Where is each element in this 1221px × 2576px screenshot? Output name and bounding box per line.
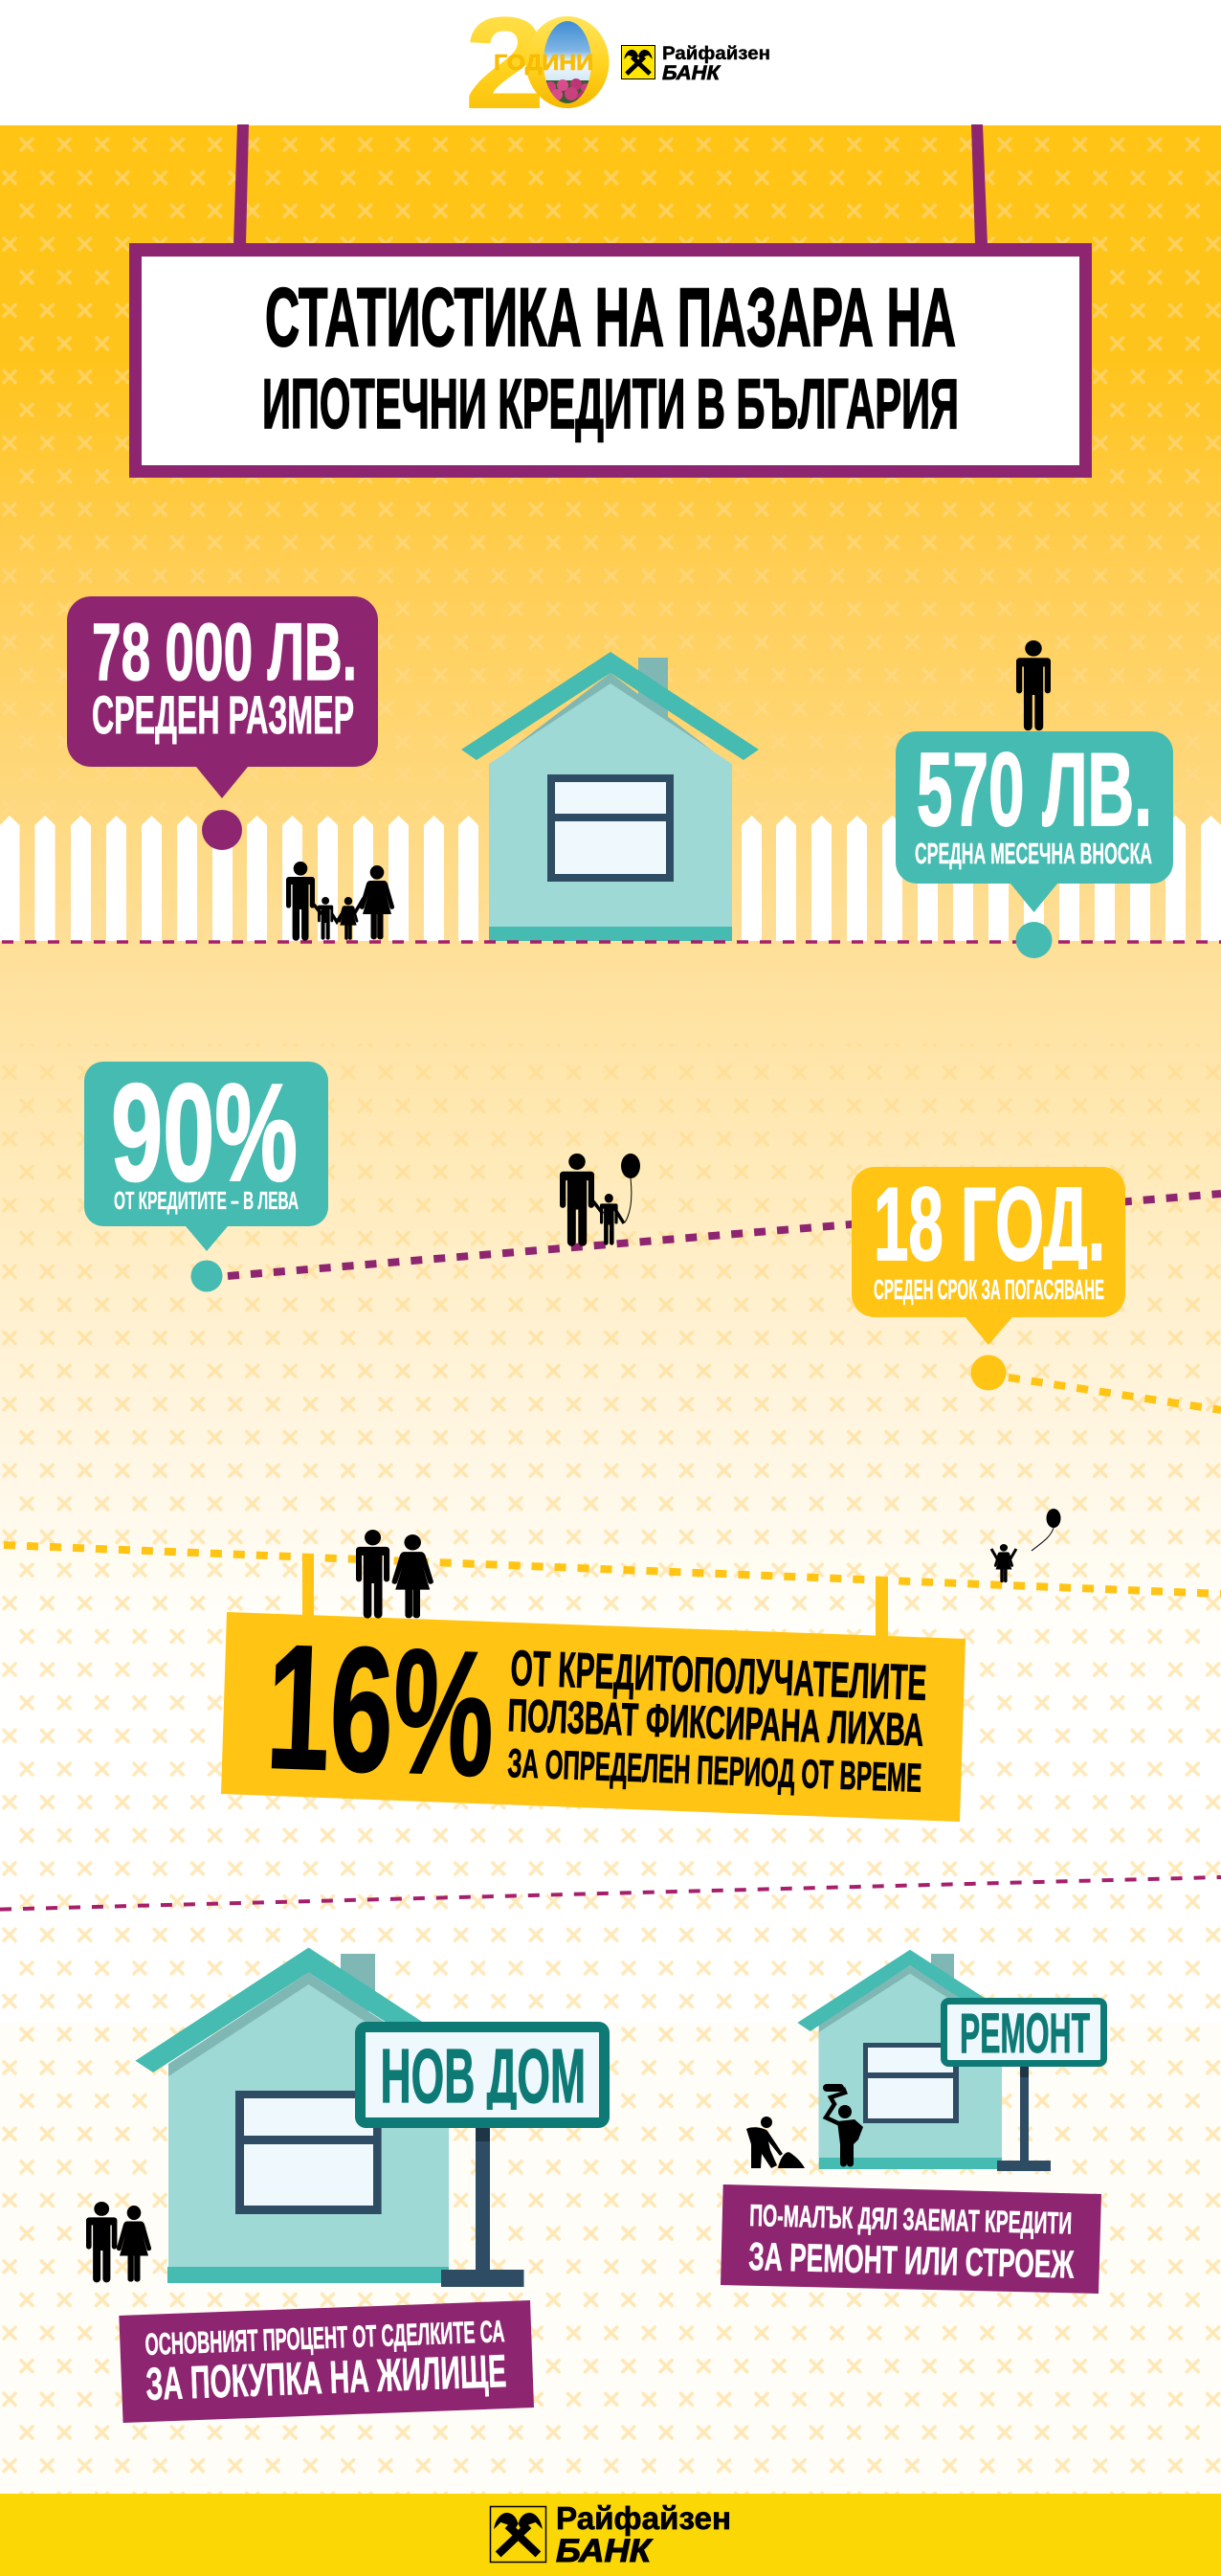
logo: 20 years anniversary: ГОДИНИ [494, 50, 593, 75]
header band [0, 0, 1221, 125]
footer bank name: БАНК [556, 2533, 653, 2569]
callout: 78 000 lv average size: СРЕДЕН РАЗМЕР [92, 684, 354, 745]
sign: renovation: РЕМОНТ [960, 2003, 1090, 2065]
sign: new home [360, 2027, 605, 2123]
callout: 78 000 lv average size: 78 000 ЛВ. [92, 607, 357, 697]
callout: 90% in leva: ОТ КРЕДИТИТЕ – В ЛЕВА [114, 1186, 299, 1215]
sign: renovation [944, 2001, 1104, 2065]
footer bank name: Райфайзен [556, 2500, 731, 2536]
fixed rate text: ЗА ОПРЕДЕЛЕН ПЕРИОД ОТ ВРЕМЕ [507, 1740, 922, 1801]
icon: child with balloon [991, 1509, 1060, 1582]
callout: 18 years average term [852, 1166, 1125, 1390]
dashed line yellow long [4, 1545, 1221, 1594]
callout: 90% in leva: 90% [111, 1055, 298, 1210]
icon: couple by house [86, 2202, 151, 2282]
logo: 20 years anniversary [469, 16, 609, 108]
ground dashed line [2, 940, 1221, 944]
footer band with logo [0, 2494, 1221, 2576]
banner: renovation loans [721, 2184, 1101, 2294]
logo: Raiffeisen Bank header [622, 44, 770, 84]
icon: painter with roller [823, 2084, 863, 2167]
icon: single person [1016, 640, 1051, 730]
dashed line yellow [1009, 1378, 1221, 1410]
title sign [129, 124, 1092, 478]
sign: new home: НОВ ДОМ [381, 2033, 586, 2118]
fixed rate text: ПОЛЗВАТ ФИКСИРАНА ЛИХВА [507, 1691, 924, 1757]
icon: family [286, 862, 394, 941]
callout: 78 000 lv average size [67, 596, 378, 850]
dashed line thin [0, 1877, 1221, 1910]
house illustration [461, 652, 759, 941]
callout: 570 lv monthly instalment [896, 731, 1173, 958]
icon: couple on sign [356, 1530, 433, 1619]
hanging sign: 16% fixed rate [221, 1554, 966, 1822]
icon: Raiffeisen logo [490, 2506, 545, 2562]
icon: parent and child with balloon [560, 1154, 640, 1246]
16 percent figure: 16% [264, 1608, 498, 1814]
fixed rate text: ОТ КРЕДИТОПОЛУЧАТЕЛИТЕ [510, 1641, 927, 1712]
logo: Raiffeisen Bank header: БАНК [662, 62, 722, 84]
title text [262, 272, 959, 443]
fixed rate text [507, 1641, 927, 1801]
footer bank name [556, 2500, 731, 2569]
icon: worker with shovel [746, 2117, 805, 2168]
dashed slope purple [228, 1194, 1221, 1276]
picket fence [0, 816, 1221, 941]
banner: purchase of housing [119, 2300, 534, 2423]
small house with sign [797, 1950, 1104, 2171]
banner: purchase of housing: ЗА ПОКУПКА НА ЖИЛИЩЕ [144, 2346, 507, 2410]
callout: 90% in leva [84, 1055, 328, 1292]
big house with sign [135, 1947, 605, 2287]
banner: purchase of housing: ОСНОВНИЯТ ПРОЦЕНТ ОТ СДЕЛКИТЕ СА [144, 2314, 505, 2362]
logo: Raiffeisen Bank header: Райфайзен [662, 44, 770, 64]
